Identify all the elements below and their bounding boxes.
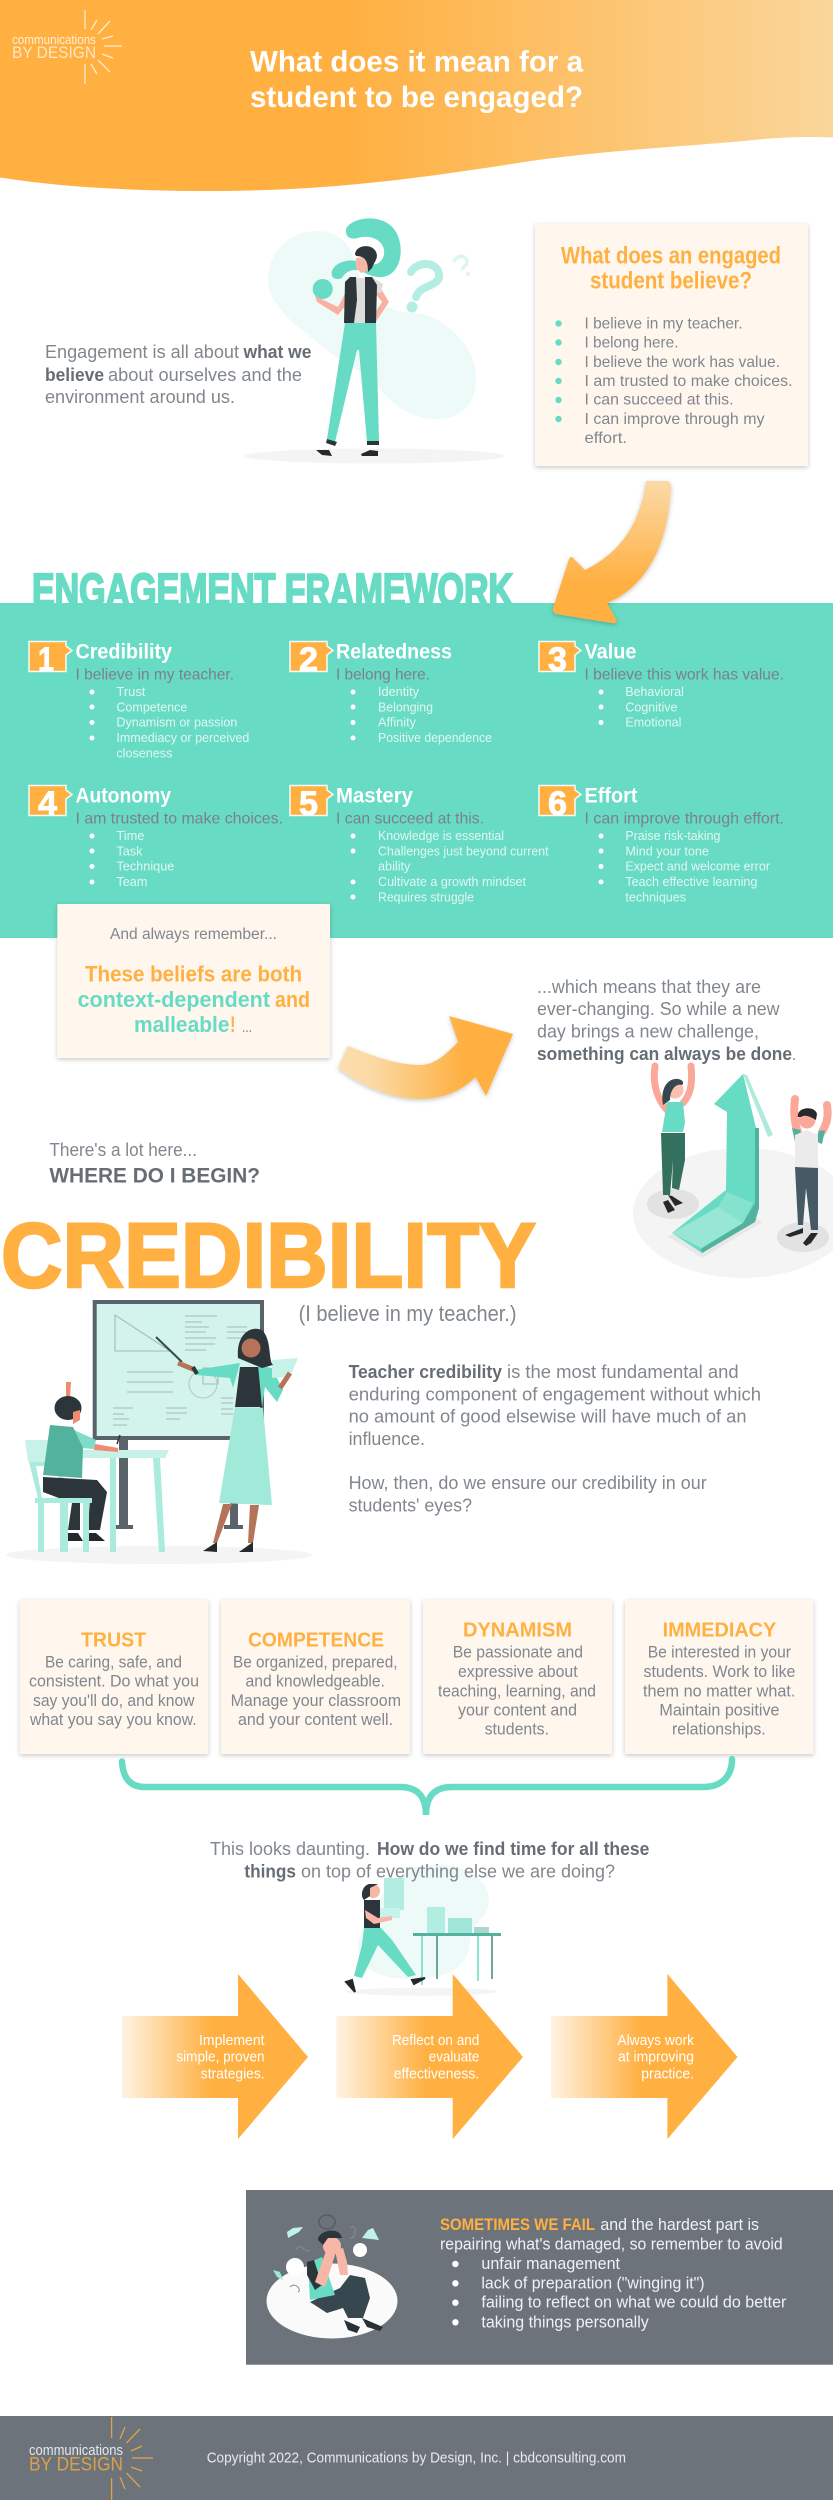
panel: and always remember	[57, 904, 330, 1058]
subheading: I believe in my teacher: (I believe in my teacher.)	[299, 1301, 516, 1326]
item 5: mastery: Knowledge is essential	[378, 828, 504, 843]
item 3: value: Cognitive	[625, 699, 677, 714]
item 1: credibility: 1	[38, 641, 54, 679]
text: sometimes we fail: taking things personally	[481, 2312, 649, 2331]
text: sometimes we fail: repairing what's damaged, so remember to avoid	[440, 2235, 783, 2254]
panel: immediacy: them no matter what.	[643, 1682, 795, 1700]
arrow step: implement: simple, proven	[176, 2050, 265, 2066]
panel: and always remember: ...	[242, 1019, 252, 1036]
panel: immediacy: IMMEDIACY	[663, 1620, 777, 1642]
item 1: credibility: Credibility	[76, 641, 172, 664]
item 2: relatedness: Relatedness	[336, 641, 452, 664]
item 1: credibility: Dynamism or passion	[116, 715, 237, 730]
text: sometimes we fail	[440, 2215, 787, 2331]
panel: dynamism: expressive about	[458, 1663, 578, 1681]
arrow step: always work: at improving	[618, 2050, 694, 2066]
text: how do we find time: How do we find time for all these	[377, 1839, 649, 1859]
text: teacher credibility paragraph: is the most fundamental and	[507, 1362, 739, 1382]
item 6: effort: Praise risk-taking	[625, 828, 720, 843]
panel: immediacy: students. Work to like	[644, 1663, 795, 1681]
text: ever-changing: .	[792, 1044, 796, 1064]
text: sometimes we fail: lack of preparation ("winging it")	[481, 2273, 705, 2292]
item 5: mastery: 5	[299, 785, 318, 823]
text: sometimes we fail: failing to reflect on what we could do better	[481, 2293, 787, 2312]
text: teacher credibility paragraph	[349, 1362, 761, 1516]
item 5: mastery: Mastery	[336, 785, 413, 808]
bracket joining the four cards	[122, 1759, 732, 1815]
text: engagement intro: believe	[45, 365, 104, 385]
footer	[0, 2416, 833, 2500]
item 3: value: 3	[548, 641, 567, 679]
text: where do I begin: There's a lot here...	[49, 1140, 197, 1160]
text: ever-changing: ever-changing. So while a new	[537, 999, 780, 1019]
item 3: value: Value	[584, 641, 636, 664]
panel: competence: COMPETENCE	[248, 1629, 384, 1651]
footer logo: BY DESIGN	[29, 2455, 123, 2476]
text: how do we find time: things	[244, 1861, 296, 1881]
item 6: effort: I can improve through effort.	[584, 810, 784, 827]
card heading	[561, 242, 781, 294]
item 2: relatedness: Positive dependence	[378, 730, 492, 745]
text: engagement intro: about ourselves and the	[108, 365, 302, 385]
panel: and always remember: These beliefs are both	[85, 962, 302, 987]
panel: competence: Manage your classroom	[231, 1692, 401, 1710]
text: teacher credibility paragraph: Teacher credibility	[349, 1362, 502, 1382]
panel: trust: say you'll do, and know	[33, 1692, 195, 1710]
item 1: credibility: Trust	[116, 684, 146, 699]
panel: dynamism: DYNAMISM	[463, 1620, 572, 1642]
footer logo	[29, 2417, 153, 2500]
item 4: autonomy: Team	[116, 874, 147, 889]
item 1: credibility	[29, 641, 249, 760]
item 2: relatedness	[290, 641, 492, 745]
text: teacher credibility paragraph: no amount of good elsewise will have much of an	[349, 1407, 746, 1427]
illustration: thinking man with question marks	[245, 218, 505, 464]
illustration: stressed person	[266, 2215, 398, 2338]
arrow step: reflect: effectiveness.	[394, 2066, 479, 2082]
item 1: credibility: I believe in my teacher.	[76, 667, 234, 684]
arrow step: always work: Always work	[617, 2033, 695, 2049]
item 3: value	[539, 641, 784, 730]
panel: trust: TRUST	[81, 1629, 146, 1651]
belief list	[555, 316, 792, 447]
panel: dynamism: Be passionate and	[453, 1644, 583, 1662]
item 6: effort	[539, 785, 784, 904]
text: sometimes we fail: unfair management	[481, 2254, 620, 2273]
text: ever-changing: day brings a new challenge,	[537, 1022, 759, 1042]
item 6: effort: Mind your tone	[625, 843, 709, 858]
item 6: effort: Effort	[584, 785, 638, 808]
panel: trust	[20, 1600, 208, 1754]
text: ever-changing	[537, 977, 796, 1064]
item 4: autonomy: I am trusted to make choices.	[76, 810, 283, 827]
panel: immediacy: Be interested in your	[648, 1644, 791, 1662]
item 1: credibility: Competence	[116, 699, 187, 714]
arrow step: always work: practice.	[641, 2066, 694, 2082]
title: What does it mean for a	[250, 46, 583, 78]
arrow step: reflect: Reflect on and	[392, 2033, 479, 2049]
text: sometimes we fail: SOMETIMES WE FAIL	[440, 2215, 595, 2234]
text: engagement intro: what we	[243, 342, 312, 362]
item 6: effort: 6	[548, 785, 567, 823]
logo: communications by design	[12, 10, 122, 84]
item 2: relatedness: Belonging	[378, 699, 433, 714]
panel: framework band	[0, 603, 833, 938]
panel: and always remember: !	[230, 1012, 236, 1037]
footer logo: communications	[29, 2443, 123, 2459]
copyright: Copyright 2022, Communications by Design, Inc. | cbdconsulting.com	[207, 2451, 626, 2467]
item 4: autonomy: Time	[116, 828, 144, 843]
panel: immediacy: Maintain positive	[659, 1701, 780, 1719]
arrow step: reflect: evaluate	[429, 2050, 479, 2066]
text: how do we find time: on top of everything else we are doing?	[301, 1861, 615, 1881]
panel: dynamism	[423, 1600, 612, 1754]
item 1: credibility: closeness	[116, 745, 173, 760]
panel: competence	[221, 1600, 410, 1754]
panel: competence: Be organized, prepared,	[233, 1653, 398, 1671]
belief list: I am trusted to make choices.	[584, 373, 792, 390]
item 2: relatedness: 2	[299, 641, 318, 679]
item 5: mastery	[290, 785, 549, 904]
belief list: effort.	[584, 430, 627, 447]
logo: communications by design: BY DESIGN	[12, 43, 96, 62]
panel: and always remember: and	[275, 987, 310, 1012]
arrow: curved to the right	[338, 1016, 513, 1099]
panel: immediacy: relationships.	[672, 1721, 766, 1739]
text: ever-changing: ...which means that they are	[537, 977, 761, 997]
item 2: relatedness: Identity	[378, 684, 419, 699]
item 6: effort: Teach effective learning	[625, 874, 757, 889]
item 5: mastery: I can succeed at this.	[336, 810, 484, 827]
text: how do we find time: This looks daunting.	[210, 1839, 370, 1859]
illustration: woman carrying stack of papers to desk	[346, 1865, 501, 1996]
panel: and always remember: context-dependent	[78, 987, 271, 1012]
panel: immediacy	[625, 1600, 814, 1754]
panel: and always remember: And always remember...	[110, 926, 277, 943]
item 6: effort: techniques	[625, 889, 686, 904]
item 3: value: Emotional	[625, 715, 682, 730]
title	[250, 46, 583, 114]
text: teacher credibility paragraph: influence.	[349, 1429, 425, 1449]
heading: engagement framework: ENGAGEMENT FRAMEWORK	[32, 564, 513, 616]
illustration: people with rising arrow	[633, 1066, 833, 1278]
item 4: autonomy: Task	[116, 843, 143, 858]
text: teacher credibility paragraph: enduring component of engagement without which	[349, 1385, 761, 1405]
panel: dynamism: students.	[485, 1721, 549, 1739]
arrow step: implement: Implement	[199, 2033, 265, 2049]
item 5: mastery: Cultivate a growth mindset	[378, 874, 526, 889]
logo: communications by design: communications	[12, 32, 96, 47]
arrow: from beliefs card down to framework	[553, 481, 671, 623]
arrow step: always work	[551, 1974, 738, 2139]
item 4: autonomy: 4	[38, 785, 57, 823]
item 5: mastery: Challenges just beyond current	[378, 843, 549, 858]
text: sometimes we fail: and the hardest part is	[600, 2215, 759, 2234]
panel: trust: what you say you know.	[29, 1711, 197, 1729]
panel: trust: Be caring, safe, and	[45, 1653, 182, 1671]
text: engagement intro	[45, 342, 312, 407]
item 6: effort: Expect and welcome error	[625, 859, 771, 874]
panel: and always remember: malleable	[134, 1012, 230, 1037]
item 5: mastery: Requires struggle	[378, 889, 474, 904]
arrow step: implement: strategies.	[201, 2066, 265, 2082]
belief list: I believe in my teacher.	[584, 316, 742, 332]
item 1: credibility: Immediacy or perceived	[116, 730, 249, 745]
card heading: student believe?	[590, 268, 752, 294]
item 4: autonomy: Technique	[116, 859, 174, 874]
text: engagement intro: environment around us.	[45, 387, 235, 407]
arrow step: reflect	[336, 1974, 523, 2139]
item 4: autonomy: Autonomy	[76, 785, 171, 808]
panel: sometimes we fail	[246, 2190, 833, 2365]
belief list: I belong here.	[584, 334, 678, 352]
panel: competence: and your content well.	[238, 1711, 393, 1729]
card heading: What does an engaged	[561, 242, 781, 270]
illustration: teacher and student at board	[6, 1302, 312, 1564]
item 2: relatedness: Affinity	[378, 715, 416, 730]
text: where do I begin	[49, 1140, 260, 1188]
belief list: I can improve through my	[584, 411, 764, 428]
item 5: mastery: ability	[378, 859, 411, 874]
item 3: value: I believe this work has value.	[584, 667, 784, 684]
item 2: relatedness: I belong here.	[336, 667, 430, 684]
title: student to be engaged?	[250, 81, 583, 114]
text: ever-changing: something can always be done	[537, 1044, 792, 1064]
panel: competence: and knowledgeable.	[246, 1673, 385, 1691]
heading: credibility: CREDIBILITY	[1, 1205, 536, 1307]
belief list: I believe the work has value.	[584, 354, 780, 371]
panel: trust: consistent. Do what you	[29, 1673, 199, 1691]
panel: dynamism: your content and	[458, 1701, 577, 1719]
text: teacher credibility paragraph: students' eyes?	[349, 1496, 472, 1516]
belief list: I can succeed at this.	[584, 392, 734, 409]
panel: dynamism: teaching, learning, and	[438, 1682, 596, 1700]
text: engagement intro: Engagement is all about	[45, 342, 239, 362]
arrow step: implement	[122, 1974, 308, 2139]
text: teacher credibility paragraph: How, then, do we ensure our credibility in our	[349, 1473, 707, 1493]
text: how do we find time	[210, 1839, 649, 1881]
text: where do I begin: WHERE DO I BEGIN?	[49, 1165, 260, 1188]
item 3: value: Behavioral	[625, 684, 684, 699]
header banner	[0, 0, 833, 191]
panel: what does an engaged student believe	[535, 224, 808, 466]
item 4: autonomy	[29, 785, 283, 889]
